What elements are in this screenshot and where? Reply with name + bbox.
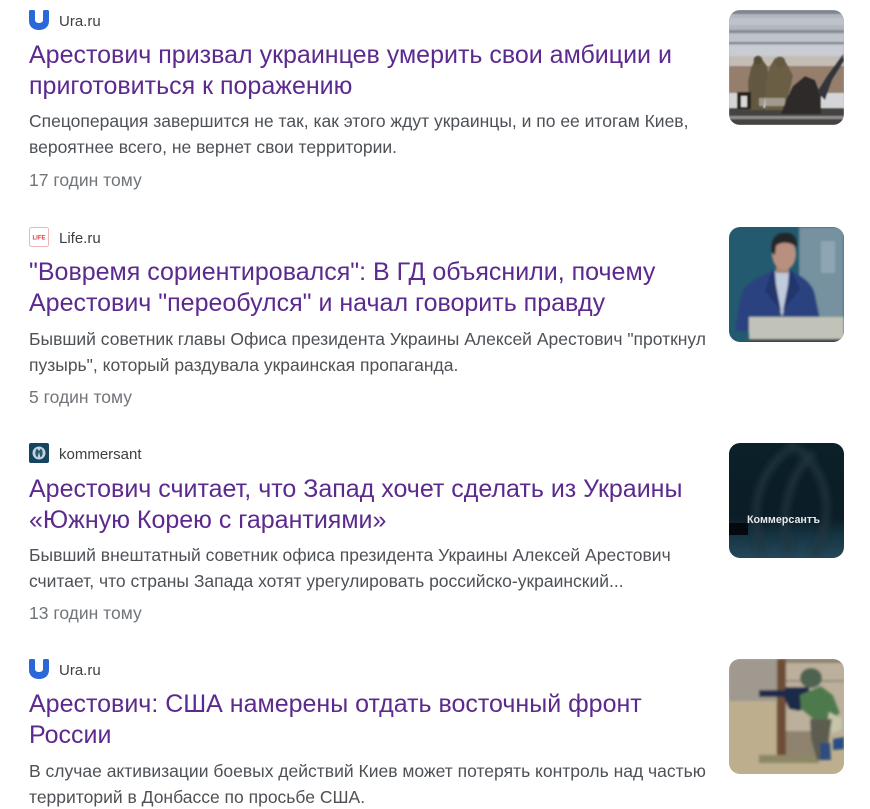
headline 2: Арестович "переобулся" и начал говорить правду [29, 289, 605, 317]
snippet 1: Спецоперация завершится не так, как этого ждут украинцы, и по ее итогам Киев, [29, 111, 688, 131]
icon: Ura.ru logo [29, 659, 49, 679]
source: Ura.ru: Ura.ru [59, 662, 101, 679]
headline 1: Арестович призвал украинцев умерить свои амбиции и [29, 41, 672, 69]
source: Ura.ru: Ura.ru [59, 13, 101, 30]
thumbnail: Kommersant brand card: Коммерсантъ [747, 514, 820, 526]
thumbnail: soldiers with anti-aircraft gun [729, 10, 844, 125]
snippet 2: пузырь", который раздувала украинская пропаганда. [29, 355, 458, 375]
icon: Life.ru logo [29, 227, 49, 247]
snippet 3: Бывший внештатный советник офиса президента Украины Алексей Арестович [29, 545, 671, 565]
snippet 4: В случае активизации боевых действий Киев может потерять контроль над частью [29, 761, 706, 781]
snippet 3 [29, 545, 671, 591]
headline 4: Арестович: США намерены отдать восточный фронт [29, 690, 642, 718]
source: Life.ru: Life.ru [59, 230, 101, 247]
headline 4: России [29, 721, 111, 749]
headline 1: приготовиться к поражению [29, 72, 352, 100]
headline 4 [29, 690, 642, 749]
headline 3 [29, 475, 682, 534]
timestamp 3: 13 годин тому [29, 603, 142, 623]
snippet 1: вероятнее всего, не вернет свои территории. [29, 137, 397, 157]
snippet 4 [29, 761, 706, 807]
icon: Kommersant logo [29, 443, 49, 463]
snippet 1 [29, 111, 688, 157]
headline 3: Арестович считает, что Запад хочет сделать из Украины [29, 475, 682, 503]
icon: Life.ru logo: LIFE [32, 236, 46, 242]
snippet 2: Бывший советник главы Офиса президента Украины Алексей Арестович "проткнул [29, 329, 706, 349]
timestamp 1: 17 годин тому [29, 170, 142, 190]
timestamp 2: 5 годин тому [29, 387, 132, 407]
headline 2: "Вовремя сориентировался": В ГД объяснили, почему [29, 258, 655, 286]
headline 2 [29, 258, 656, 317]
snippet 2 [29, 329, 706, 375]
thumbnail: Kommersant brand card [729, 443, 844, 558]
headline 1 [29, 41, 672, 100]
snippet 4: территорий в Донбассе по просьбе США. [29, 787, 365, 807]
source: kommersant: kommersant [59, 446, 142, 463]
snippet 3: считает, что страны Запада хотят урегулировать российско-украинский... [29, 571, 624, 591]
thumbnail: speaker at lectern [729, 227, 844, 342]
icon: Ura.ru logo [29, 10, 49, 30]
headline 3: «Южную Корею с гарантиями» [29, 506, 386, 534]
thumbnail: soldier aiming rifle [729, 659, 844, 774]
